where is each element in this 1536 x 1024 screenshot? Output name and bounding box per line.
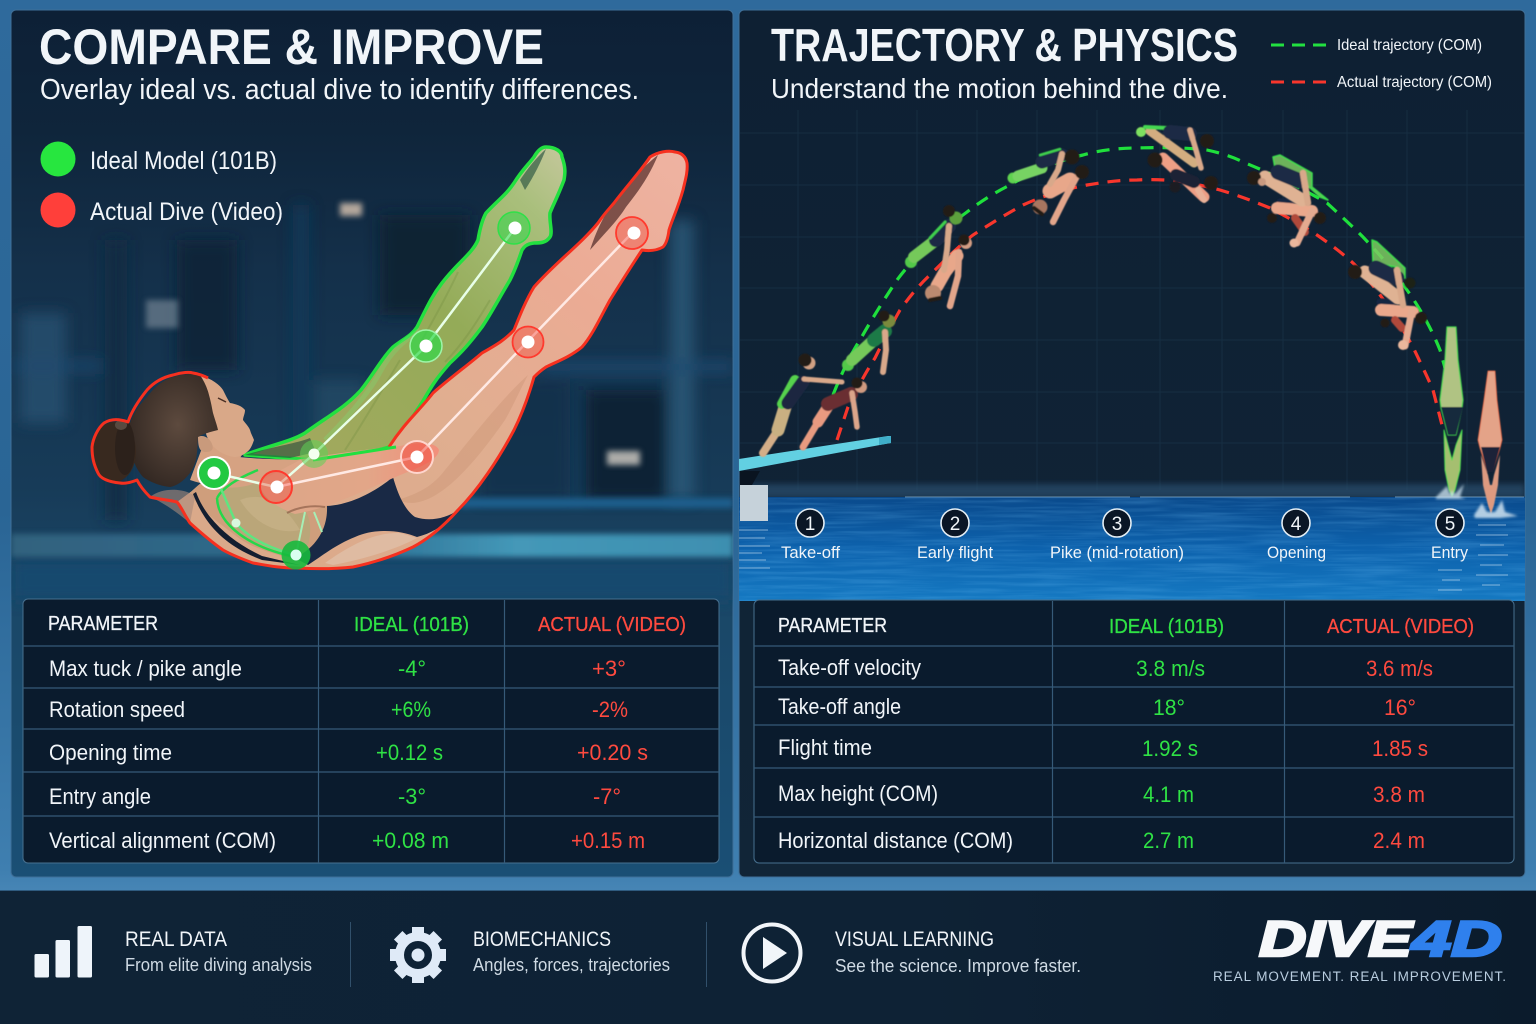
table: compare parameters [23,599,719,863]
step 1 take-off [781,509,840,562]
row: vertical alignment: +0.08 m [372,828,449,853]
footer band [0,890,1536,1024]
row: opening time: Opening time [49,740,172,765]
feature: real data [125,928,312,975]
row: max tuck: +3° [592,656,626,681]
table header [778,615,1474,638]
step 5 entry: Entry [1431,544,1469,562]
row: rotation speed [49,697,628,722]
row: entry angle: -3° [398,784,426,809]
table header: ACTUAL (VIDEO) [1327,616,1474,638]
row: max height: Max height (COM) [778,781,938,806]
row: horizontal distance: 2.7 m [1143,828,1194,853]
step 3 pike [1050,509,1184,562]
opening ideal [1247,155,1328,203]
logo: dive4d [1259,911,1502,967]
row: entry angle: Entry angle [49,784,151,809]
diving board [739,436,891,521]
row: flight time [778,735,1428,761]
step 5 entry [1431,509,1469,562]
feature: biomechanics [473,928,670,975]
row: max height [778,781,1425,807]
title: trajectory and physics: TRAJECTORY & PHYSICS [771,19,1238,71]
ideal model leg [245,147,565,460]
row: take-off velocity: 3.8 m/s [1136,656,1205,681]
row: flight time: 1.92 s [1142,736,1198,761]
row: take-off velocity: 3.6 m/s [1366,656,1433,681]
step 1 take-off: 1 [805,514,815,535]
row: flight time: Flight time [778,735,872,760]
dark shin band [590,155,658,250]
take-off ideal [763,354,842,453]
row: take-off angle: 16° [1384,695,1416,720]
row: horizontal distance [778,828,1425,853]
hair [129,374,218,487]
divers: ideal sequence [763,127,1463,496]
legend: ideal model: Ideal Model (101B) [90,147,277,175]
panel: trajectory and physics [739,10,1525,877]
step 4 opening [1267,509,1326,562]
row: take-off angle: Take-off angle [778,694,901,719]
thigh shading [398,375,528,503]
title: compare and improve: COMPARE & IMPROVE [39,19,544,75]
splash: actual entry [1474,500,1518,518]
take-off actual [803,378,867,447]
green back tint [217,477,310,556]
step 1 take-off: Take-off [781,544,840,562]
step 5 entry: 5 [1445,514,1455,535]
step 3 pike: Pike (mid-rotation) [1050,544,1184,562]
early pike ideal [905,205,962,270]
row: opening time: +0.12 s [376,740,443,765]
step 3 pike: 3 [1112,514,1122,535]
illustration: overlay diver with joints [92,147,687,570]
row: opening time: +0.20 s [577,740,648,765]
row: vertical alignment: Vertical alignment (COM) [49,828,276,853]
legend: actual dive [40,192,283,228]
legend: actual dive: Actual Dive (Video) [90,198,283,226]
step 2 early flight: Early flight [917,544,993,562]
step 2 early flight [917,509,993,562]
row: max height: 4.1 m [1143,782,1194,807]
logo: dive4d: 4D [1411,911,1502,967]
swimsuit [295,477,455,565]
row: max tuck: -4° [398,656,426,681]
opening actual [1267,202,1326,248]
early flight ideal [842,310,896,372]
feature: biomechanics: BIOMECHANICS [473,928,611,951]
feature: biomechanics: Angles, forces, trajectories [473,955,670,975]
divers: actual sequence [803,152,1502,514]
water [739,484,1525,601]
feature: visual learning [835,928,1081,976]
row: max tuck: Max tuck / pike angle [49,656,242,681]
red outline [92,151,687,569]
row: vertical alignment: +0.15 m [571,828,645,853]
feature: real data: REAL DATA [125,928,227,951]
skeleton: actual [260,217,648,503]
feature: real data: From elite diving analysis [125,955,312,975]
trajectory: actual [837,180,1442,440]
neck and shoulder [190,440,300,488]
row: opening time [49,740,648,765]
tagline: REAL MOVEMENT. REAL IMPROVEMENT. [1213,969,1506,984]
panel: compare and improve [11,10,733,877]
row: horizontal distance: 2.4 m [1373,828,1425,853]
tuck ideal [1348,240,1416,305]
tuck actual [1380,302,1427,350]
subtitle: compare: Overlay ideal vs. actual dive to identify differences. [40,74,639,106]
icon: bar chart [34,926,92,978]
skin strip under suit [325,533,417,565]
mid rotation ideal [1136,127,1214,168]
green outline on torso [217,470,296,557]
back skin [190,461,328,562]
arm [258,443,439,514]
row: entry angle [49,784,621,809]
skeleton: ideal [198,212,530,570]
row: max height: 3.8 m [1373,782,1425,807]
trajectory: ideal [833,148,1445,395]
row: horizontal distance: Horizontal distance (COM) [778,828,1013,853]
feature: visual learning: VISUAL LEARNING [835,928,994,951]
row: rotation speed: -2% [592,697,628,722]
row: take-off angle [778,694,1416,720]
row: vertical alignment [49,828,645,853]
row: take-off angle: 18° [1153,695,1185,720]
legend: actual trajectory: Actual trajectory (COM) [1337,74,1492,91]
table header [48,613,686,636]
entry actual [1478,371,1502,514]
mid rotation actual [1148,152,1218,200]
entry ideal [1440,327,1463,496]
step 2 early flight: 2 [950,514,960,535]
step 4 opening: Opening [1267,544,1326,562]
icon: play [744,924,800,982]
row: rotation speed: Rotation speed [49,697,185,722]
feature: visual learning: See the science. Improve faster. [835,956,1081,976]
actual body and leg [177,151,687,569]
logo: dive4d: DIVE [1259,911,1414,967]
pike ideal lead [1008,149,1080,184]
blurred pool hall backdrop [11,203,733,600]
row: flight time: 1.85 s [1372,736,1428,761]
splash: ideal entry [1436,484,1466,499]
pike actual two [1032,165,1089,222]
row: take-off velocity: Take-off velocity [778,655,921,680]
face [200,375,254,457]
pike actual one [925,234,972,306]
row: max tuck [49,656,626,681]
step 4 opening: 4 [1291,514,1302,535]
row: take-off velocity [778,655,1433,681]
table header: ACTUAL (VIDEO) [538,614,686,636]
legend: ideal trajectory: Ideal trajectory (COM) [1337,37,1482,54]
table header: PARAMETER [778,615,887,637]
table: physics parameters [754,600,1514,863]
legend: ideal model [40,142,277,176]
row: entry angle: -7° [593,784,621,809]
table header: IDEAL (101B) [354,614,469,636]
icon: gear [390,927,446,983]
row: rotation speed: +6% [391,697,431,722]
subtitle: trajectory: Understand the motion behind the dive. [771,73,1228,104]
table header: IDEAL (101B) [1109,616,1224,638]
table header: PARAMETER [48,613,158,635]
